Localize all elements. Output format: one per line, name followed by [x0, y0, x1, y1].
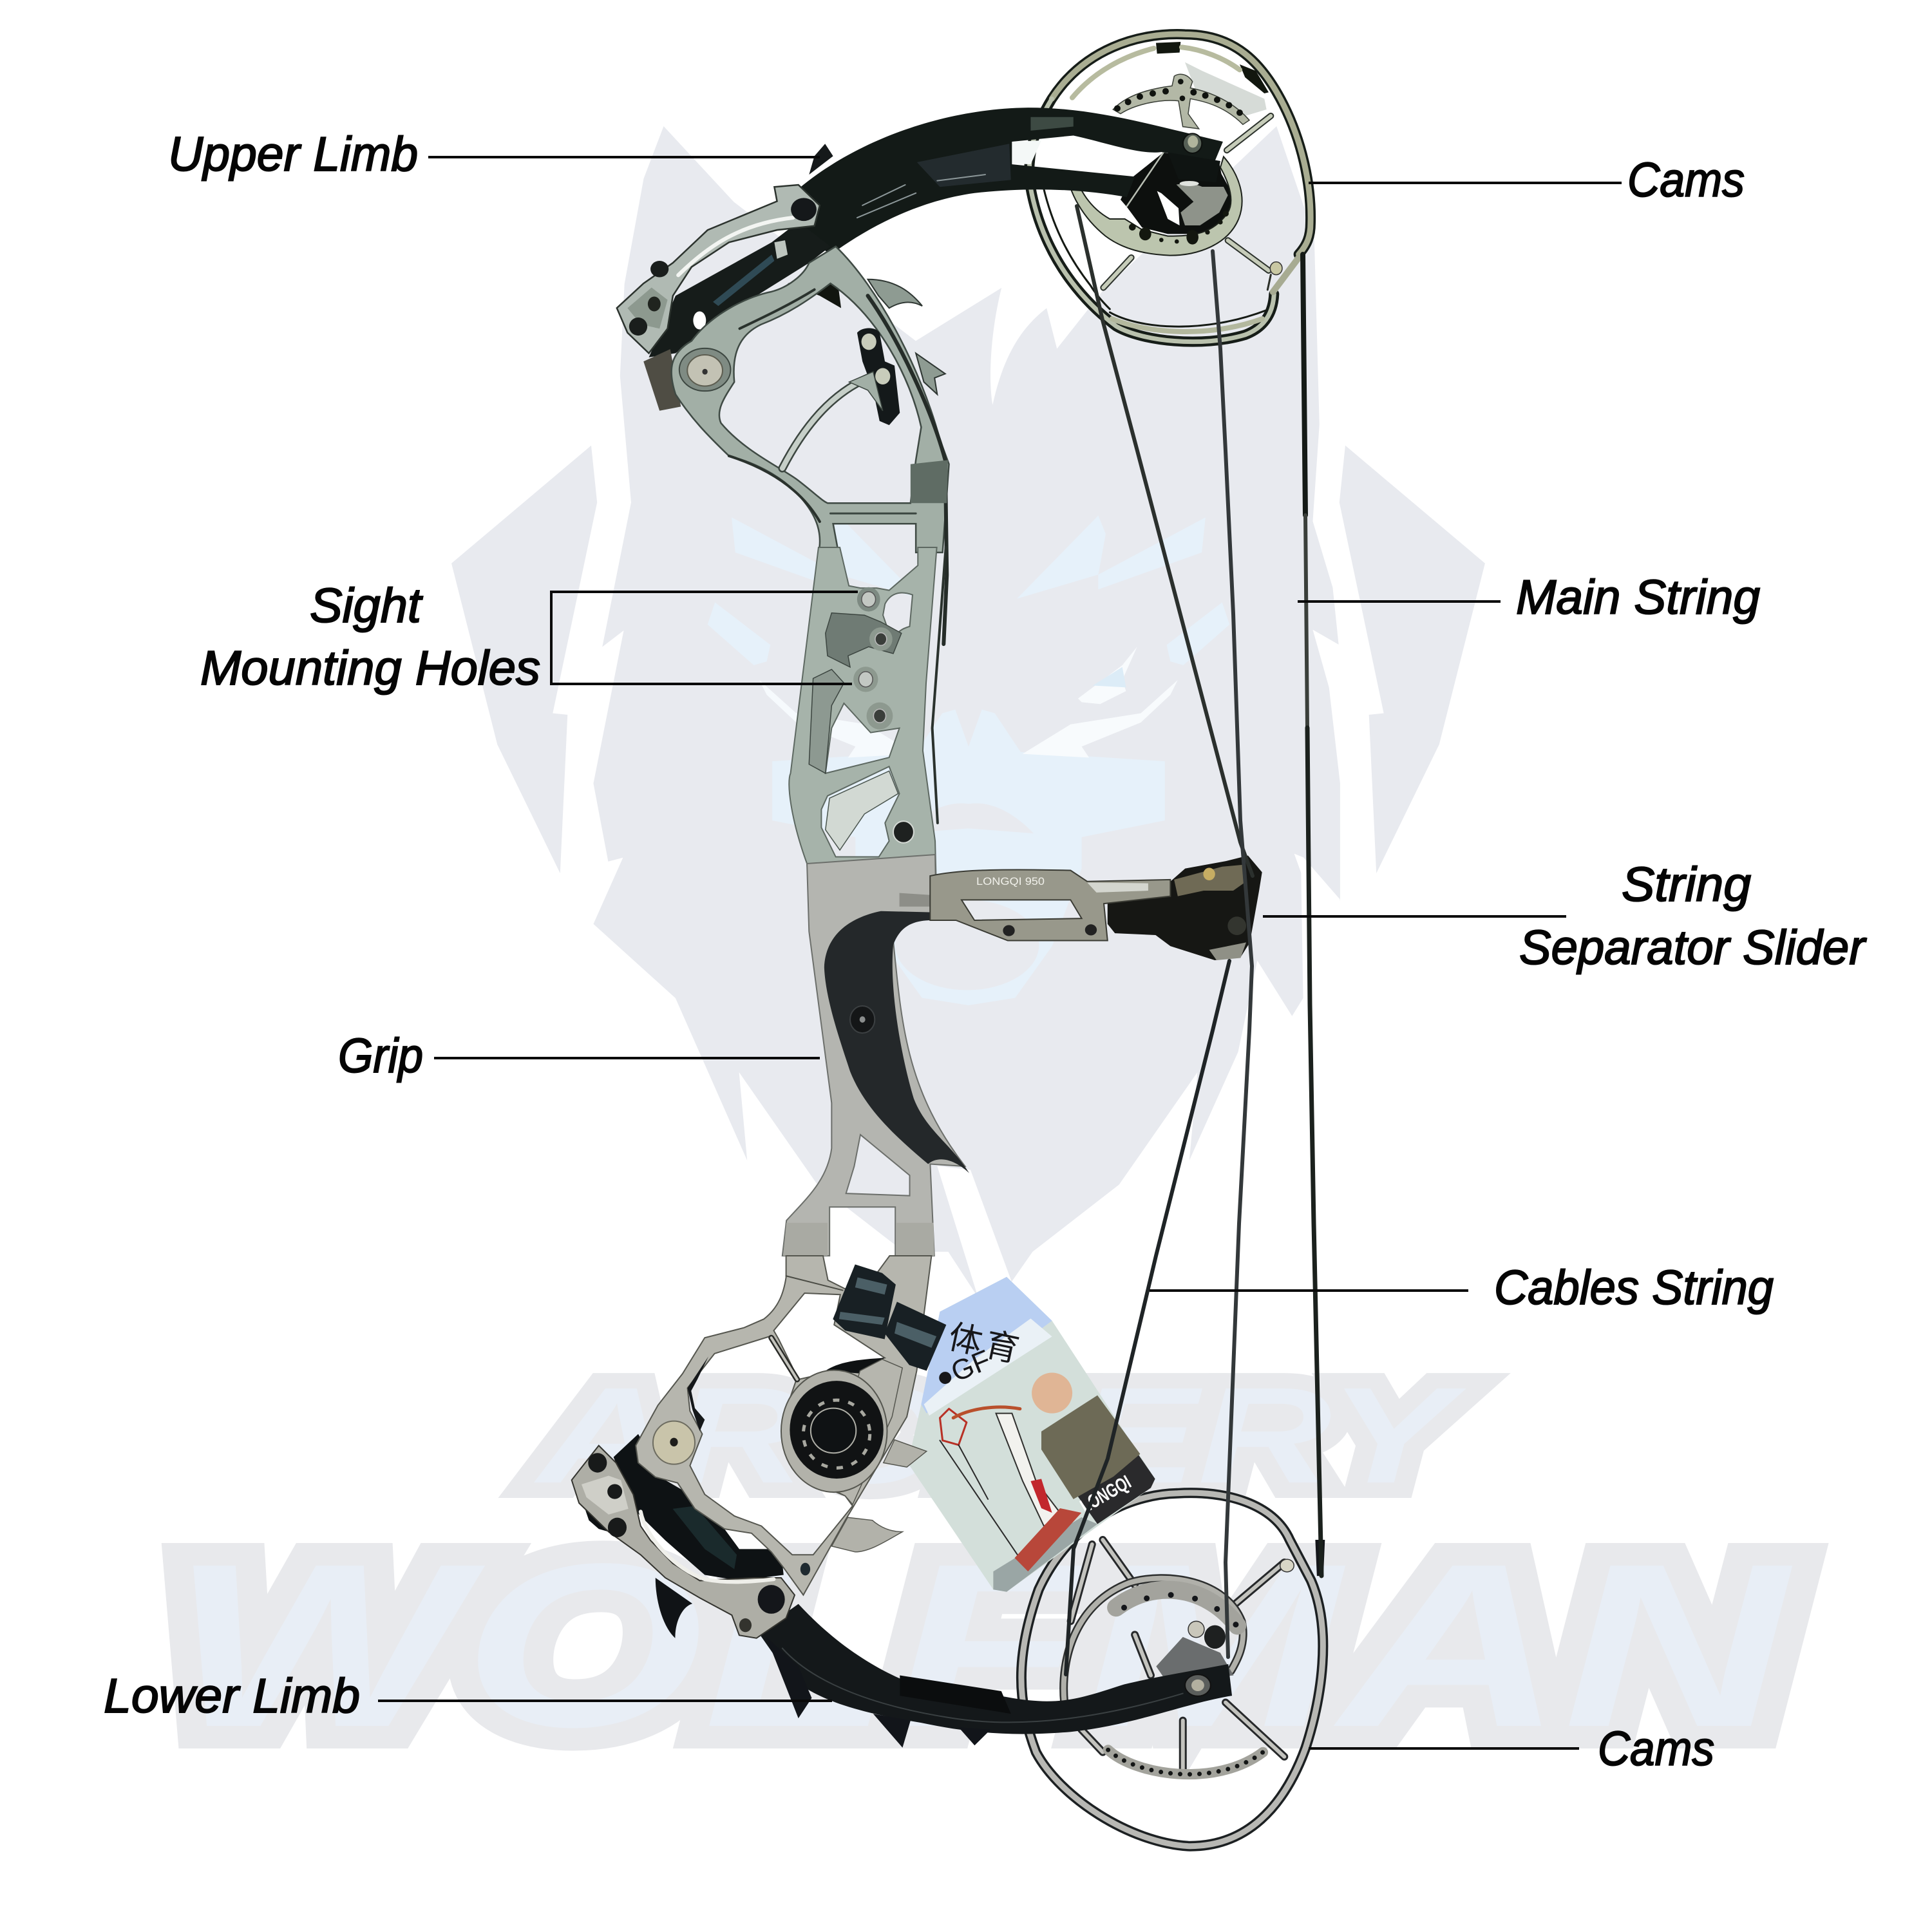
rear rib: [933, 547, 946, 823]
slider silver arm: [930, 869, 1170, 941]
cam pale smudge: [1185, 62, 1267, 116]
riser dark edge: [729, 290, 820, 522]
main string upper serving: [1303, 254, 1305, 515]
crossbar line: [830, 513, 916, 515]
stabiliser mount: [857, 328, 900, 425]
top cam limb bolt: [1168, 133, 1220, 182]
pocket window: [724, 1529, 772, 1549]
wolf eye streak: [1023, 680, 1178, 757]
slider engraving: LONGQI 950: [976, 875, 1045, 887]
slider dark clamp: [1108, 856, 1262, 960]
frame inner shadow: [688, 1356, 708, 1431]
grip: [824, 911, 969, 1173]
upper limb pocket dark: [643, 222, 841, 411]
frame top edge line: [786, 1276, 843, 1291]
card chinese text: 体 育: [945, 1318, 1022, 1370]
inner wall of slot: [826, 613, 902, 667]
callout: Grip: Grip: [338, 1028, 423, 1083]
damper block: [833, 1264, 946, 1371]
ring dark fillets: [1156, 42, 1269, 93]
watermark: ARCHERY: ARCHERY: [533, 1359, 1467, 1511]
cam hub: [1156, 1637, 1234, 1682]
outer ring: [1029, 34, 1311, 342]
main string center: [1305, 515, 1307, 728]
lower hole arc: [1108, 1750, 1263, 1774]
main string lower: [1307, 728, 1321, 1576]
rear spike: [656, 1578, 692, 1638]
card brand text: LONGQI: [1077, 1472, 1135, 1517]
person on card: [1041, 1396, 1140, 1499]
callout: String Separator Slider: [1263, 857, 1867, 974]
frame strut: [772, 1338, 797, 1379]
watermark: wolf mouth: [895, 900, 1039, 990]
callout: Cams bottom: Cams: [1598, 1721, 1714, 1776]
lower rocker: [572, 1446, 795, 1638]
limb spikes: [766, 1637, 990, 1748]
callout: Cables String: Cables String: [1494, 1260, 1774, 1314]
lower limb: [759, 1604, 1232, 1748]
limb spike: [809, 144, 833, 175]
lower riser spikes: [831, 1517, 902, 1552]
riser upper frame: [672, 247, 949, 644]
sight mounting hole bosses: [857, 587, 880, 612]
strings: [1066, 206, 1321, 1674]
inner cam ring: [1068, 156, 1242, 256]
callout: Sight Mounting Holes: [200, 578, 858, 695]
chrome arc in lower window: [826, 771, 898, 850]
riser strut: [782, 378, 868, 468]
wolf eye: [1078, 647, 1137, 704]
upper limb: [799, 108, 1223, 254]
frame bolt: [653, 1421, 695, 1464]
frame body: [636, 1256, 931, 1595]
spokes: [1103, 116, 1271, 288]
riser spikes: [868, 279, 922, 308]
cam pin: [1270, 262, 1282, 275]
bow illustration on card: [940, 1409, 967, 1445]
callout: Sight Mounting Holes: Mounting Holes: [200, 641, 540, 695]
riser lower grip section: [782, 855, 965, 1256]
inner cam ring: [1064, 1578, 1243, 1703]
callout: String Separator Slider: Separator Slider: [1519, 920, 1867, 974]
dark limb pocket: [614, 1434, 784, 1580]
arm hub: [781, 1370, 887, 1492]
hang tag card: [908, 1277, 1155, 1592]
riser pivot bolt: [679, 348, 730, 391]
lower riser frame: [584, 1256, 931, 1638]
callout: Main String: Main String: [1516, 570, 1760, 624]
top cam: [1029, 34, 1311, 342]
bottom cam: [1021, 1493, 1325, 1846]
watermark: wolf face details: [708, 515, 1340, 1005]
string separator slider: [930, 856, 1262, 960]
cable string upper: [1077, 206, 1253, 876]
rear rib: [868, 296, 947, 644]
riser center section: [782, 547, 965, 1256]
card logo text: ●GF: [931, 1344, 995, 1394]
cam hole arc: [1113, 74, 1249, 129]
hub backing: [826, 1358, 885, 1374]
cam hub dark: [1121, 153, 1235, 234]
wolf muzzle: [938, 803, 1034, 833]
cable string lower: [1066, 961, 1229, 1674]
callout: Upper Limb: Upper Limb: [168, 127, 418, 181]
upper rocker: [617, 185, 820, 354]
watermark: wolf head logo: [451, 126, 1485, 1314]
pale bands: [1072, 47, 1240, 98]
watermark: WOLFMAN: WOLFMAN: [171, 1515, 1795, 1776]
center cable: [1213, 251, 1252, 1657]
callout: Sight Mounting Holes: Sight: [310, 578, 423, 632]
callout: Cams top: Cams: [1627, 153, 1745, 207]
callout: String Separator Slider: String: [1622, 857, 1751, 911]
callout: Lower Limb: Lower Limb: [104, 1669, 360, 1723]
watermark: highlight streaks: [937, 1103, 1225, 1320]
